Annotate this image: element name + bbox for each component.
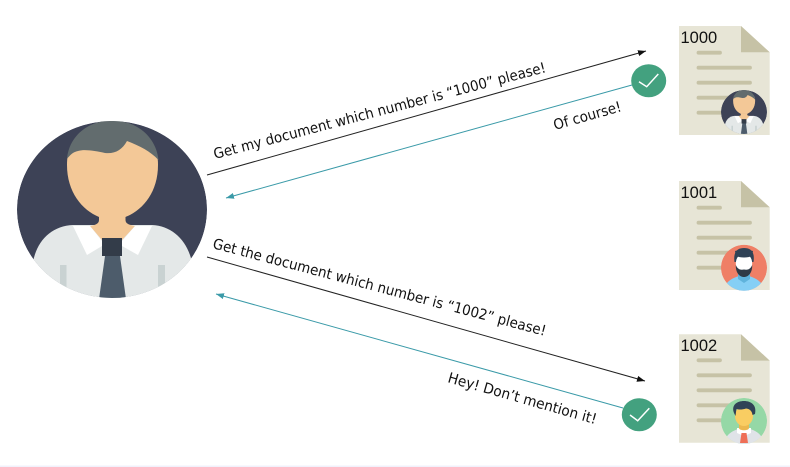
- panel: document 1001: [0, 181, 790, 467]
- avatar: main user: [17, 120, 207, 300]
- avatar: man with red tie on document 1002: [721, 398, 767, 445]
- text: of course: Of course!: [552, 99, 623, 134]
- text: don't mention it: Hey! Don’t mention it!: [446, 370, 598, 428]
- icon: green check bottom: [622, 398, 657, 431]
- panel: document 1000: [679, 26, 770, 135]
- arrow: request for document 1002: [207, 257, 645, 381]
- arrow: response from document 1000: [226, 85, 632, 198]
- avatar: small user on document 1000: [721, 90, 767, 134]
- text: request 1002: Get the document which number is “1002” please!: [211, 236, 548, 340]
- avatar: bearded man on document 1001: [721, 245, 767, 292]
- arrow: response from document 1002: [216, 294, 623, 408]
- label: 1000: 1000: [680, 29, 717, 47]
- text: request 1000: Get my document which number is “1000” please!: [212, 60, 548, 163]
- icon: green check top: [631, 64, 666, 97]
- footer strip: [0, 466, 790, 467]
- label: 1001: 1001: [680, 184, 717, 202]
- label: 1002: 1002: [680, 337, 717, 355]
- arrow: request for document 1000: [207, 51, 646, 175]
- panel: document 1002: [0, 334, 790, 467]
